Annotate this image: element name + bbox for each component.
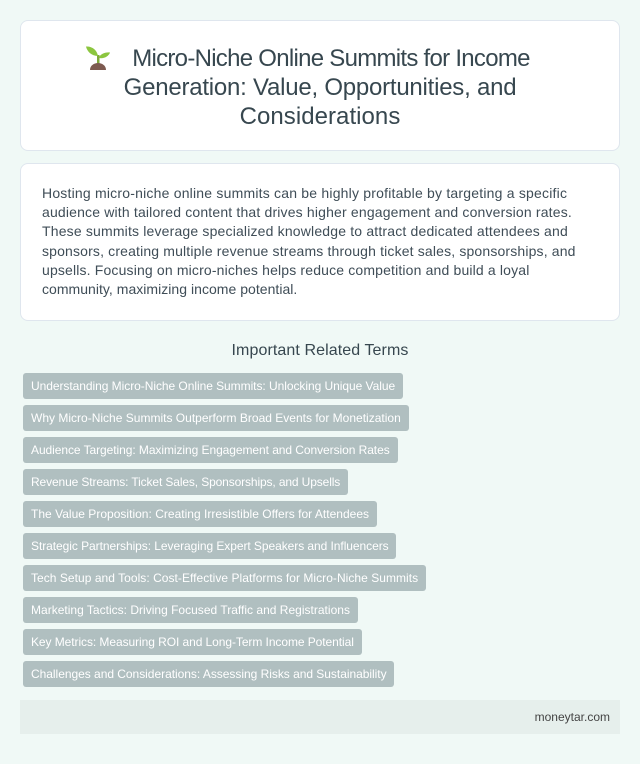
heading [124,45,530,130]
chip 3: Audience Targeting: Maximizing Engagement and Conversion Rates [31,443,390,457]
icon: seedling [86,46,110,70]
chip 2 [23,405,409,431]
chip 9: Key Metrics: Measuring ROI and Long-Term Income Potential [31,635,354,649]
heading: Generation: Value, Opportunities, and [124,74,516,101]
chip list [23,373,426,687]
heading: Micro-Niche Online Summits for Income [132,45,530,72]
heading: related terms: Important Related Terms [232,342,408,359]
chip 9 [23,629,362,655]
body text: Hosting micro-niche online summits can be highly profitable by targeting a specific [42,185,567,201]
body text: audience with tailored content that drives higher engagement and conversion rates. [42,204,572,220]
chip 2: Why Micro-Niche Summits Outperform Broad Events for Monetization [31,411,401,425]
body text: upsells. Focusing on micro-niches helps reduce competition and build a loyal [42,262,530,278]
panel: title card [20,20,620,151]
chip 10: Challenges and Considerations: Assessing Risks and Sustainability [31,667,387,681]
panel: introduction text [20,163,620,321]
chip 8: Marketing Tactics: Driving Focused Traffic and Registrations [31,603,350,617]
heading: Considerations [240,103,400,130]
body text [42,185,576,297]
chip 10 [23,661,394,687]
chip 6: Strategic Partnerships: Leveraging Expert Speakers and Influencers [31,539,389,553]
chip 4: Revenue Streams: Ticket Sales, Sponsorships, and Upsells [31,475,340,489]
chip 8 [23,597,358,623]
chip 3 [23,437,398,463]
body text: sponsors, creating multiple revenue streams through ticket sales, sponsorships, and [42,243,576,259]
chip 7: Tech Setup and Tools: Cost-Effective Platforms for Micro-Niche Summits [31,571,418,585]
body text: These summits leverage specialized knowledge to attract dedicated attendees and [42,223,568,239]
chip 1 [23,373,403,399]
chip 6 [23,533,396,559]
footer source: moneytar.com [535,710,610,724]
chip 5: The Value Proposition: Creating Irresistible Offers for Attendees [31,507,369,521]
chip 5 [23,501,377,527]
body text: community, maximizing income potential. [42,281,297,297]
chip 7 [23,565,426,591]
chip 1: Understanding Micro-Niche Online Summits: Unlocking Unique Value [31,379,395,393]
chip 4 [23,469,348,495]
footer bar [20,700,620,734]
